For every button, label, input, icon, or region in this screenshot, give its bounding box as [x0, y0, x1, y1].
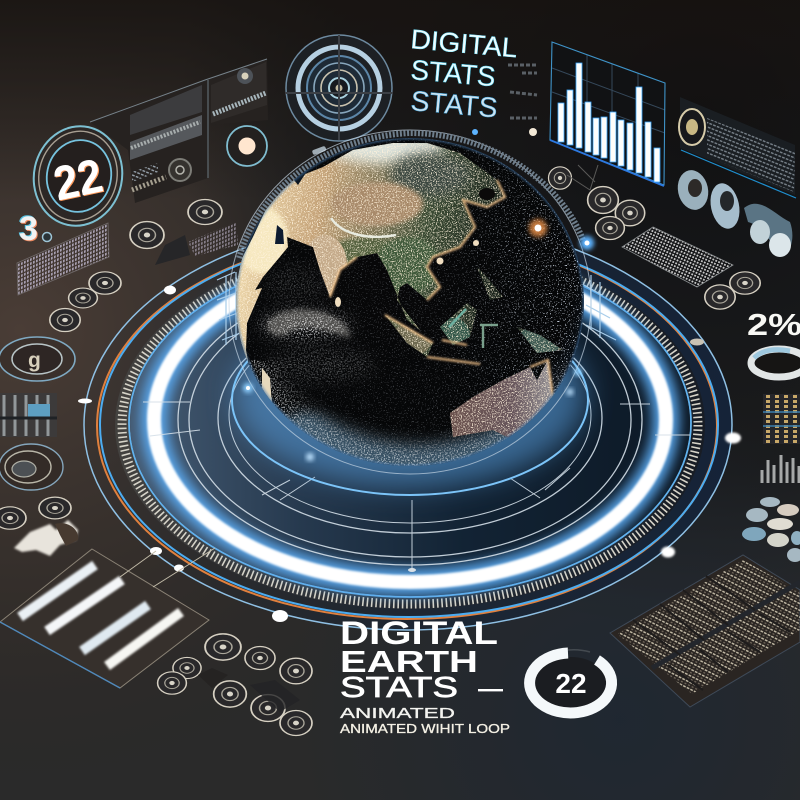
coastline lights — [330, 180, 553, 397]
bar 4 — [107, 612, 181, 666]
subtitle — [340, 705, 510, 736]
stat 3: 3 — [19, 210, 38, 248]
left concentric rings — [0, 444, 63, 490]
big 22 stat dial — [25, 118, 131, 234]
bottom title: EARTH — [340, 644, 478, 679]
panel: right info card — [679, 97, 796, 198]
left ring stat: g — [28, 349, 41, 372]
main holographic ring platform — [78, 220, 741, 630]
small dial cluster bottom — [158, 634, 312, 735]
data rows panel 2 — [211, 62, 267, 123]
left table — [0, 393, 57, 437]
lower limb — [248, 360, 572, 466]
icon: target rings — [285, 35, 393, 141]
data rows panel — [130, 85, 202, 190]
bottom title: STATS — [340, 672, 458, 704]
ring marker dots — [78, 286, 741, 622]
right mini bars — [762, 455, 799, 483]
bar 2 — [47, 580, 122, 631]
top title: STATS — [409, 85, 499, 124]
stat 3 — [18, 209, 52, 249]
small title dots — [472, 128, 537, 136]
globe halo lattice — [229, 130, 591, 474]
globe — [236, 138, 584, 466]
big 22 stat dial: 22 — [50, 150, 108, 212]
panel: right halftone card — [622, 227, 733, 287]
left ring stat — [0, 337, 75, 381]
globe side lattices — [217, 272, 616, 345]
top title — [409, 24, 519, 124]
leader lines — [120, 548, 215, 587]
left cloud blob — [14, 520, 78, 556]
inner disc — [130, 250, 690, 596]
subtitle: ANIMATED WIHIT LOOP — [340, 722, 510, 736]
panel: left halftone grid — [17, 223, 109, 295]
big 22 stat dial: 22 — [49, 150, 107, 211]
small right dials — [705, 272, 760, 309]
right pebble cluster — [742, 497, 800, 562]
faint label rows beside title — [508, 65, 537, 118]
continents — [236, 143, 563, 438]
sea speckle — [230, 130, 590, 470]
stat 3: 3 — [18, 209, 37, 247]
right eye blobs — [674, 167, 792, 257]
bar 1 — [20, 565, 95, 617]
small left dials — [0, 497, 71, 529]
dark seas — [479, 188, 495, 200]
subtitle: ANIMATED — [340, 705, 455, 722]
right mini table — [763, 394, 800, 444]
bottom 22 ring: 22 — [555, 668, 587, 699]
panel: bars parallelogram — [0, 549, 209, 688]
outer ring — [84, 220, 732, 630]
base glow — [232, 303, 588, 495]
top title: DIGITAL — [409, 24, 519, 63]
panel: right bottom data table — [610, 555, 800, 707]
limb shading — [236, 138, 584, 466]
stat 2%: 2% — [747, 307, 800, 342]
small dial cluster upper left — [50, 200, 238, 332]
bottom 22 ring — [530, 650, 612, 713]
lower ice — [262, 368, 272, 405]
himalaya arc — [331, 218, 396, 237]
donut chart right — [751, 349, 800, 377]
hex node cluster — [548, 165, 645, 240]
bar 3 — [82, 605, 148, 651]
stat 3: 3 — [20, 211, 39, 249]
glowing white ring — [154, 258, 666, 582]
panel: bar chart — [550, 42, 665, 186]
tick ring — [115, 241, 705, 609]
bottom title — [340, 615, 503, 704]
islands — [335, 240, 479, 307]
ocean — [236, 138, 584, 466]
icon: glowing dot ring — [227, 126, 267, 166]
concentric grid lines — [143, 275, 690, 570]
bars — [558, 63, 660, 182]
globe light flares — [243, 146, 594, 461]
panel: top left dashboard frames — [90, 58, 268, 203]
top title: STATS — [409, 54, 497, 92]
cloud swirl — [250, 260, 380, 390]
bottom title: DIGITAL — [340, 615, 498, 651]
